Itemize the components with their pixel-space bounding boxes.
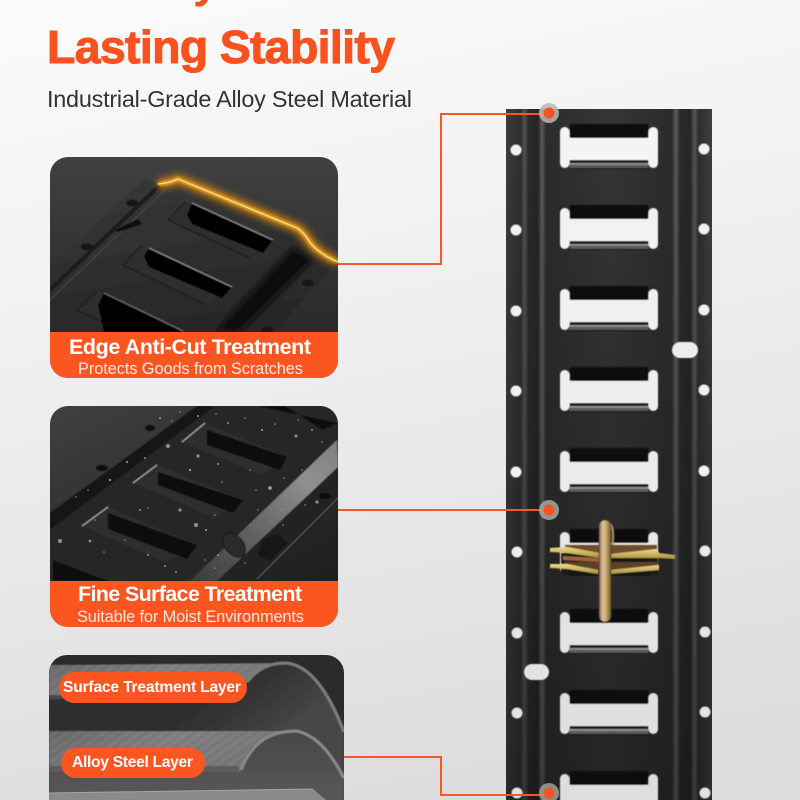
caption subtitle: Suitable for Moist Environments (77, 608, 304, 626)
connector line: surface (338, 509, 548, 511)
icon: brass hook fitting (550, 520, 675, 622)
label pill: surface treatment layer (59, 672, 247, 703)
connector line: layers (344, 757, 548, 795)
layer: surface treatment (49, 661, 344, 774)
label pill: surface treatment layer: Surface Treatment Layer (63, 679, 241, 696)
layer: base (49, 789, 326, 800)
rail close-up (50, 179, 338, 334)
marker dot: layers (539, 783, 559, 800)
panel: fine surface treatment (50, 406, 338, 627)
caption band (50, 332, 338, 378)
marker dot: edge (539, 103, 559, 123)
product: E-track rail (506, 109, 712, 800)
label pill: alloy steel layer (61, 748, 205, 778)
panel: edge anti-cut treatment (50, 157, 338, 378)
rail side holes (510, 144, 710, 798)
caption subtitle: Protects Goods from Scratches (78, 360, 303, 378)
caption title: Edge Anti-Cut Treatment (69, 335, 311, 359)
caption band (50, 581, 338, 627)
wet rail close-up (50, 406, 338, 581)
glowing edge (158, 179, 338, 262)
subtitle: Industrial-Grade Alloy Steel Material (47, 86, 412, 112)
marker dot: surface (539, 500, 559, 520)
panel: material layers (49, 655, 344, 800)
water droplets (58, 411, 329, 573)
connector line: edge (338, 114, 548, 264)
caption title: Fine Surface Treatment (78, 582, 302, 606)
title: Lasting Stability (47, 21, 395, 73)
layer: alloy steel (49, 731, 344, 800)
rail oval holes (524, 342, 698, 680)
rail slots (560, 124, 658, 800)
label pill: alloy steel layer: Alloy Steel Layer (72, 754, 193, 771)
